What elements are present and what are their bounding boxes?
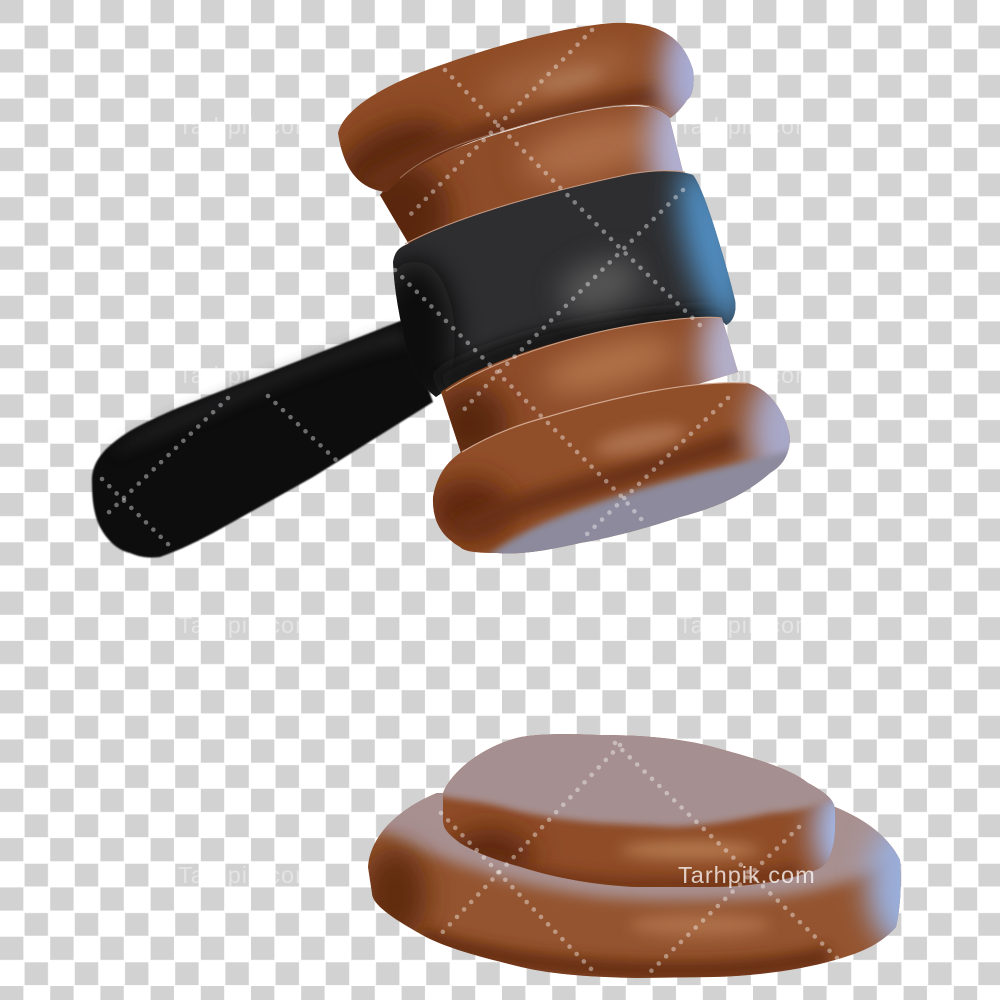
lower disc of base — [368, 793, 901, 978]
watermark text row: Tarhpik.com — [178, 862, 316, 888]
watermark text row: Tarhpik.com — [678, 113, 816, 139]
watermark on base: Tarhpik.com — [678, 862, 816, 888]
watermark text row — [178, 113, 816, 888]
lower flange of gavel head — [432, 382, 790, 554]
gavel handle — [92, 320, 433, 558]
lower brown body — [441, 316, 738, 452]
black band of gavel head — [393, 170, 736, 397]
watermark text row: Tarhpik.com — [178, 612, 316, 638]
upper flange of gavel head — [338, 22, 694, 244]
watermark text row: Tarhpik.com — [678, 612, 816, 638]
upper brown body — [380, 106, 683, 244]
watermark text row: Tarhpik.com — [678, 362, 816, 388]
watermark text row: Tarhpik.com — [178, 362, 316, 388]
watermark text row: Tarhpik.com — [178, 113, 316, 139]
sound block base — [368, 734, 901, 978]
dotted watermark lines — [102, 30, 837, 976]
upper disc of base — [443, 734, 836, 887]
gavel — [92, 12, 821, 565]
